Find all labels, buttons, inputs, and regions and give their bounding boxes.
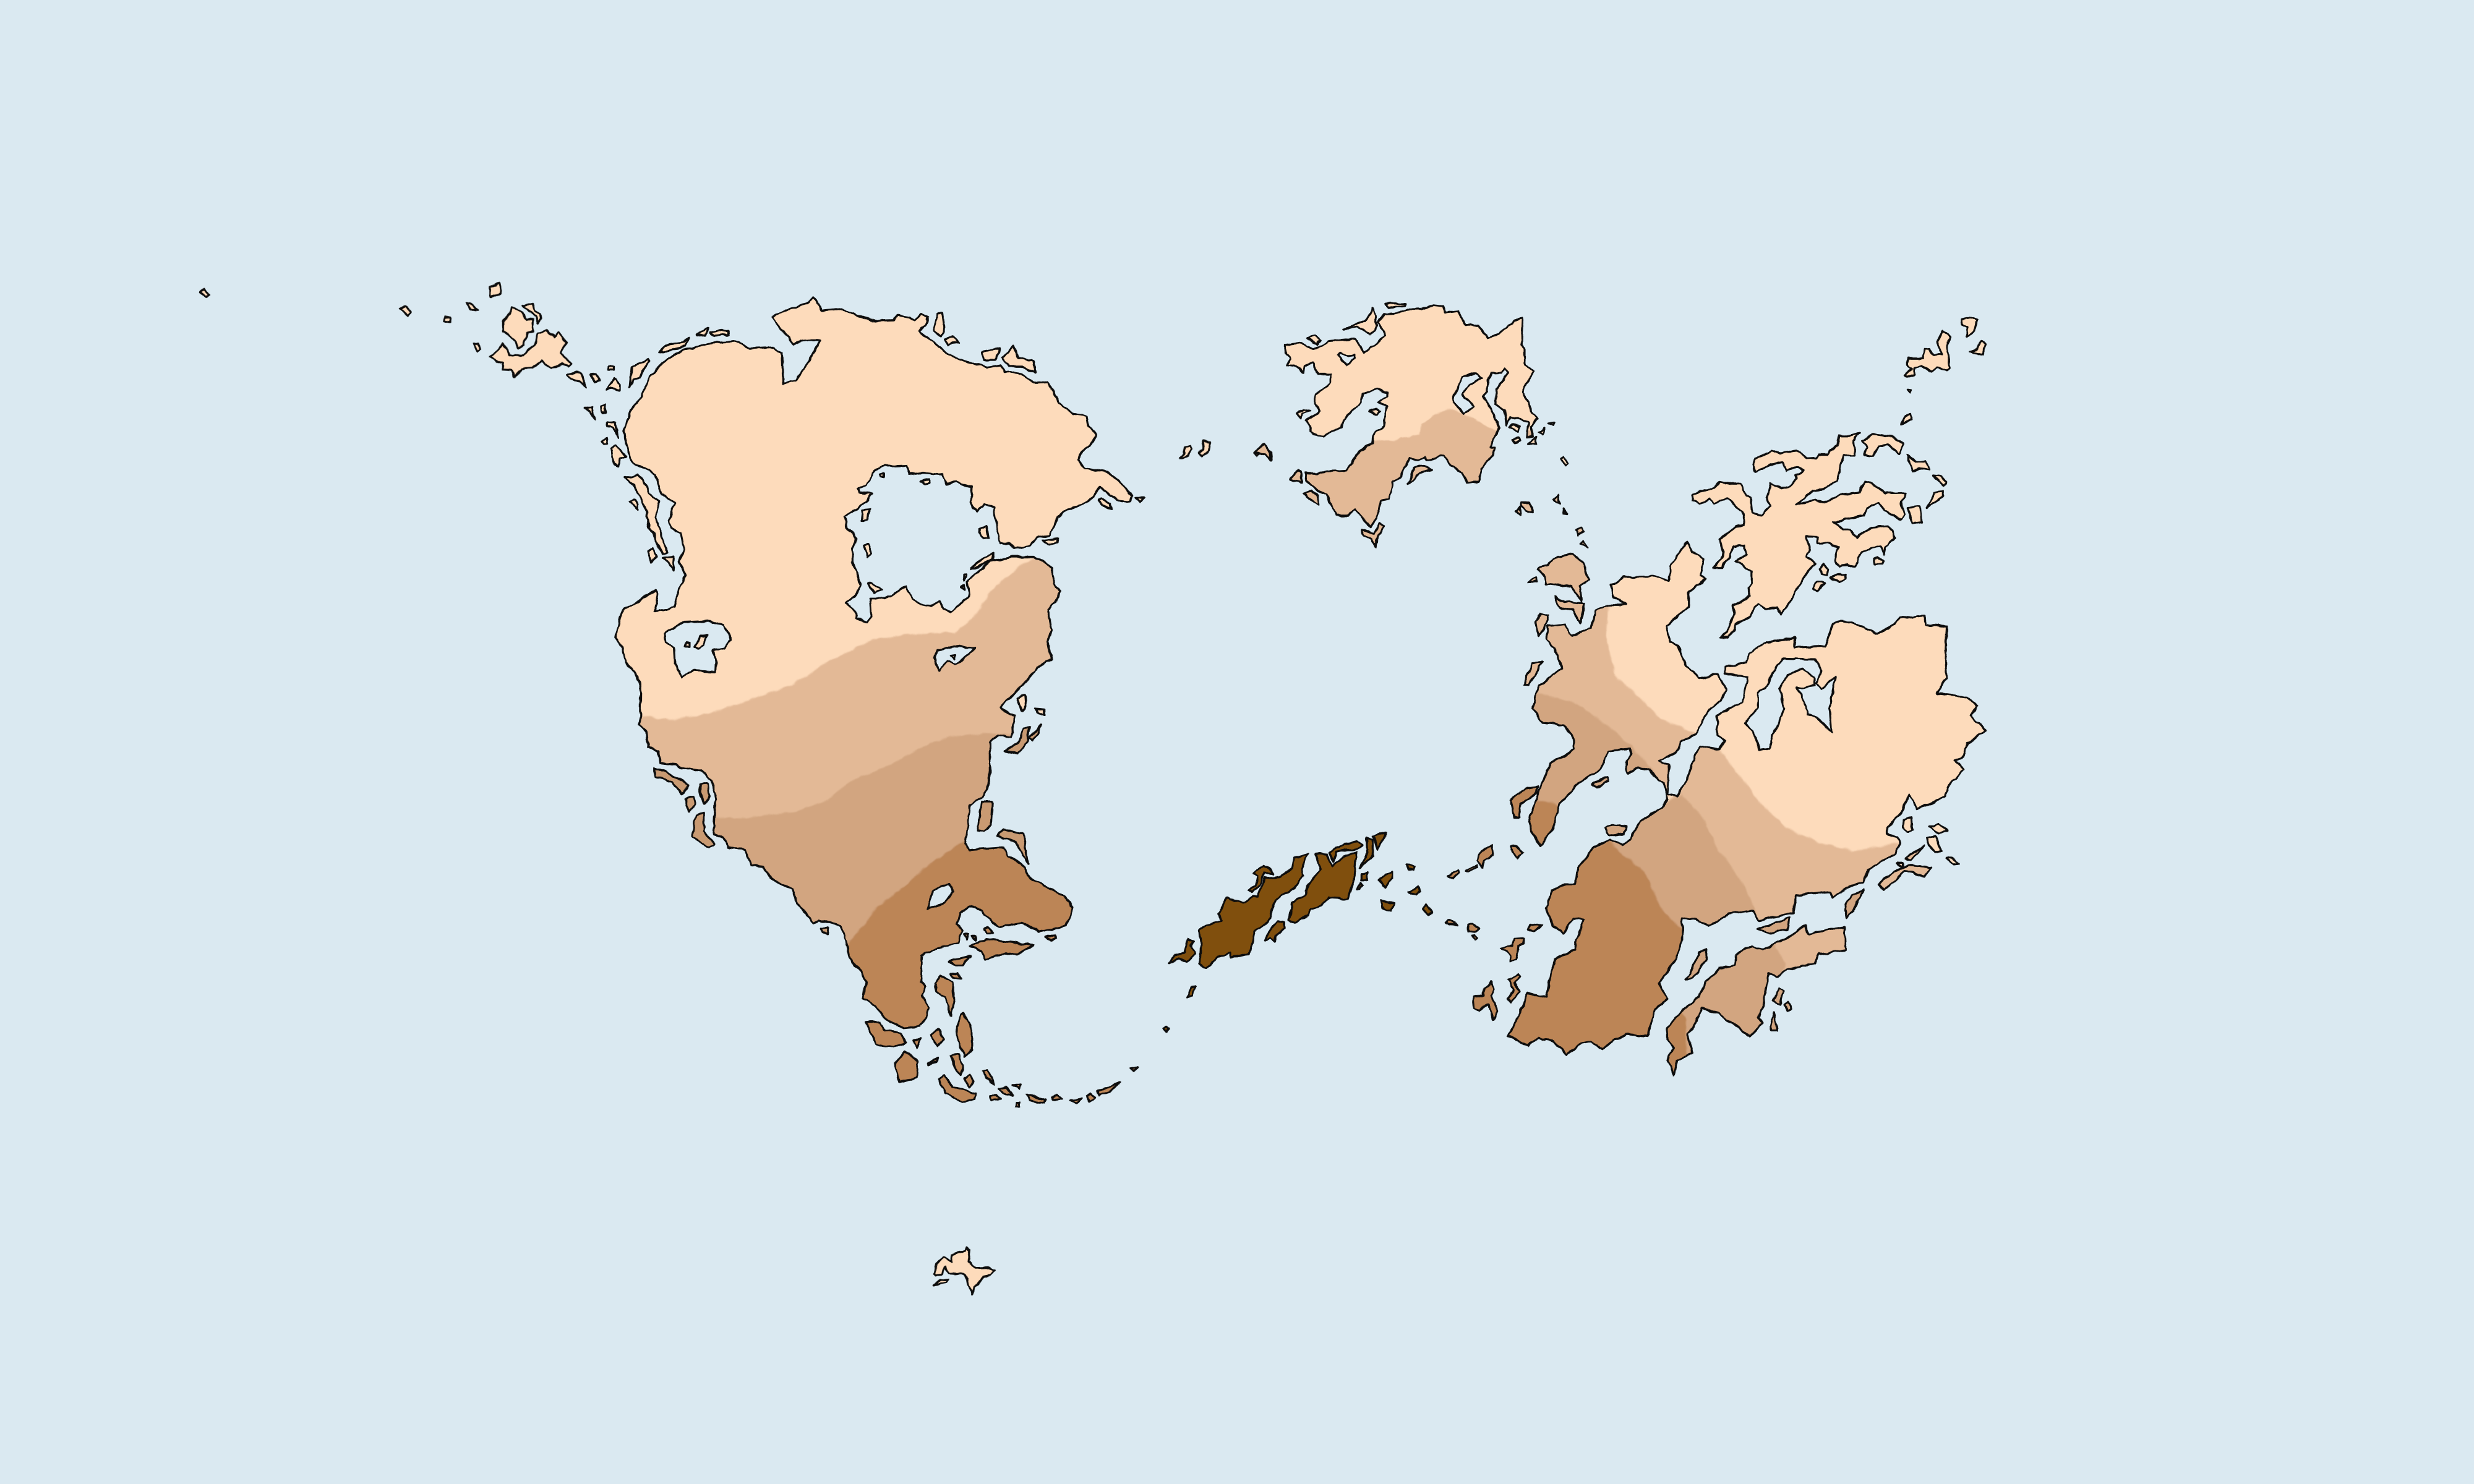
continent: northern landmass <box>1284 304 1539 528</box>
islands: southern archipelago arc <box>866 927 1137 1107</box>
islands: northeastern scatter <box>1813 318 1987 591</box>
lake: southern inland lake <box>928 884 952 910</box>
lake: western inland lake <box>664 621 731 678</box>
islands: around eastern landmass <box>1510 554 1960 1030</box>
lake: eastern C-shaped bay <box>1744 659 1836 749</box>
islands: far northwest scatter <box>201 283 571 377</box>
islands: around northern landmass <box>1254 303 1587 548</box>
lake: central inland lake <box>935 647 975 672</box>
islands: chain between central archipelago and eastern landmass <box>1423 845 1542 1020</box>
continent: northeastern landmass <box>1692 433 1906 638</box>
continent: central dark archipelago <box>1163 832 1432 1031</box>
lake: northern western lake <box>1339 352 1355 365</box>
islands: east and west coasts of western landmass <box>656 694 1045 934</box>
islands: southern lone island <box>933 1247 995 1295</box>
islands: north and inland seas of western landmass <box>568 313 1143 659</box>
world map <box>199 282 1987 1296</box>
islands: central north trio <box>1179 441 1272 459</box>
lake: northern eastern lake <box>1452 373 1482 414</box>
continent: western landmass <box>614 296 1133 1029</box>
continent: southeastern peninsula island <box>1666 924 1847 1077</box>
map landmasses <box>201 283 1987 1295</box>
continent: eastern landmass <box>1507 540 1987 1056</box>
